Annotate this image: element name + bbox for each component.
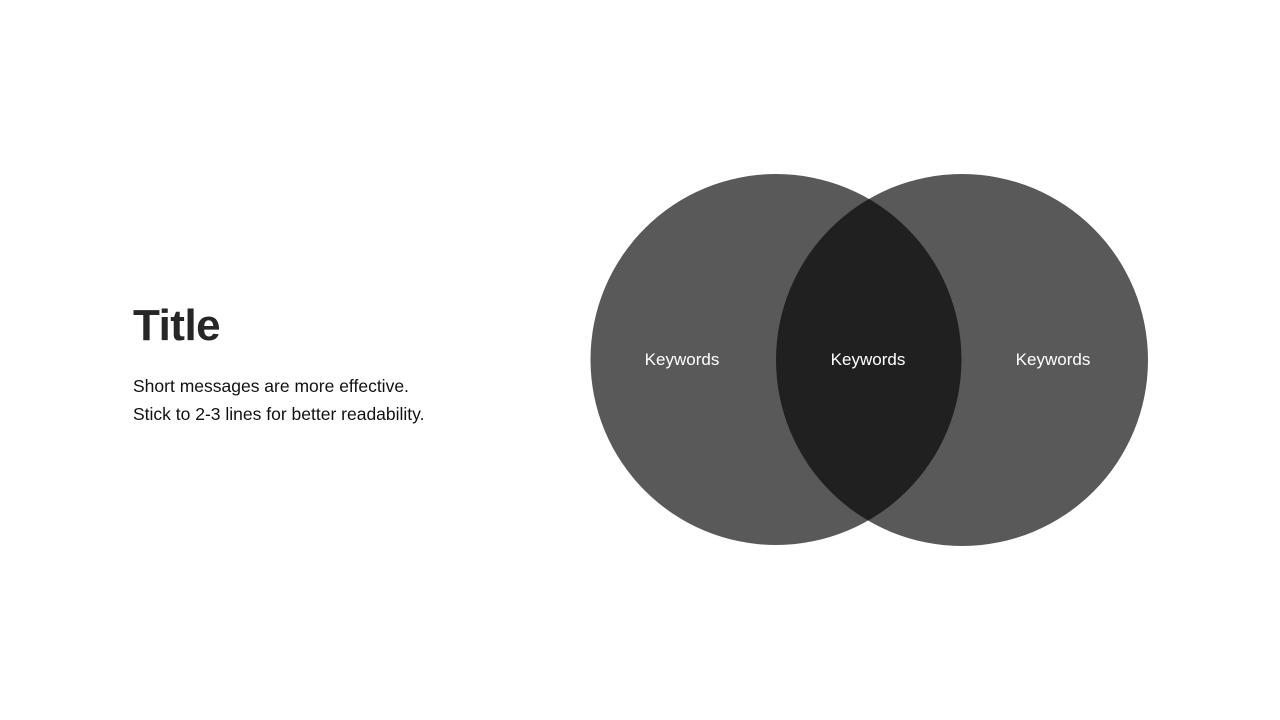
label: right keywords: Keywords (1016, 350, 1090, 369)
circle: left (590, 174, 962, 545)
text block (133, 376, 424, 424)
label: left keywords: Keywords (645, 350, 719, 369)
venn diagram (590, 174, 1148, 546)
intersection (776, 199, 962, 520)
label: center keywords: Keywords (831, 350, 905, 369)
circle: right (776, 174, 1148, 546)
text block: Stick to 2-3 lines for better readability. (133, 404, 424, 424)
text block: Short messages are more effective. (133, 376, 409, 396)
title: Title (133, 301, 220, 350)
